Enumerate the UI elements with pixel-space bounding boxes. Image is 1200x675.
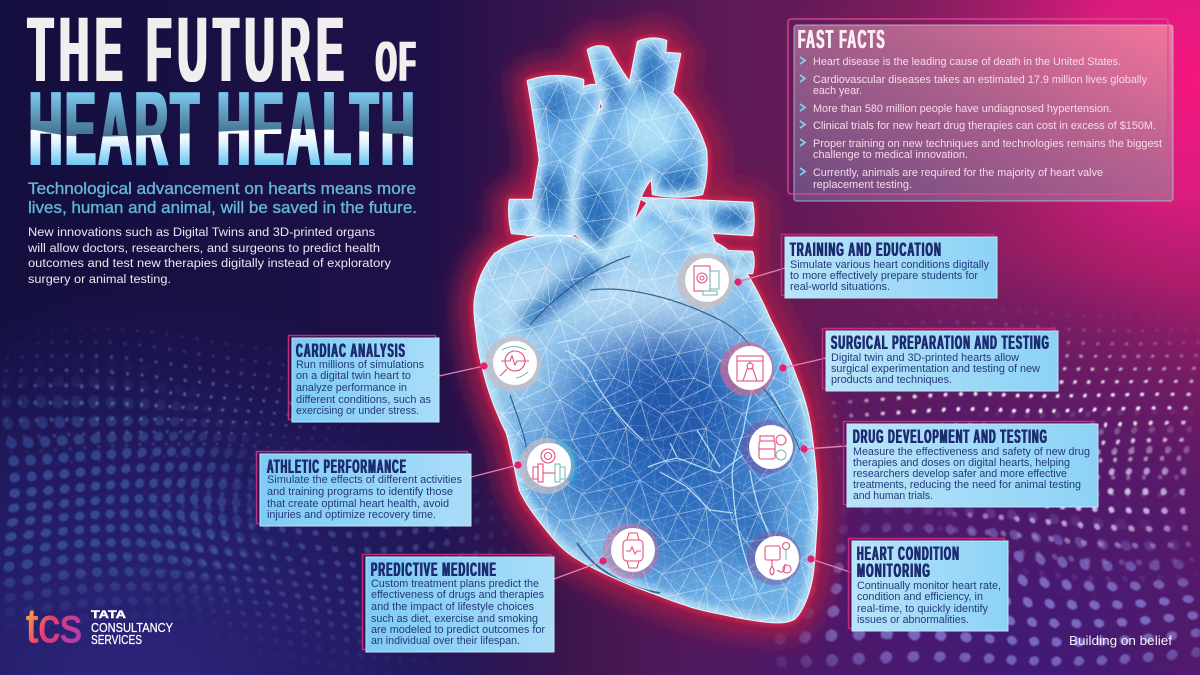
panel: athletic performance: Simulate the effects of different activities (267, 474, 462, 486)
panel: cardiac analysis: analyze performance in (296, 382, 407, 394)
panel: predictive medicine: PREDICTIVE MEDICINE (371, 560, 497, 581)
panel: predictive medicine (362, 554, 554, 652)
panel: predictive medicine: an individual over their lifespan. (371, 635, 520, 647)
logo: tata consultancy services (26, 600, 174, 653)
panel: cardiac analysis: different conditions, such as (296, 394, 431, 406)
icon: training and education (677, 253, 742, 309)
icon: heart condition monitoring (747, 531, 815, 585)
title: THE FUTURE (28, 0, 350, 101)
panel: training and education (782, 234, 997, 298)
panel: drug development and testing (844, 422, 1098, 507)
intro paragraph: surgery or animal testing. (28, 272, 171, 286)
panel: predictive medicine: and the impact of lifestyle choices (371, 601, 534, 613)
panel: drug development and testing: and human trials. (853, 490, 933, 502)
fast facts list: challenge to medical innovation. (813, 149, 968, 161)
fast facts list: More than 580 million people have undiagnosed hypertension. (813, 103, 1112, 115)
panel: heart condition monitoring: real-time, to quickly identify (857, 603, 988, 615)
panel: cardiac analysis: CARDIAC ANALYSIS (296, 341, 406, 362)
panel: training and education: to more effectively prepare students for (790, 270, 978, 282)
panel: athletic performance: ATHLETIC PERFORMANCE (267, 457, 407, 478)
panel: surgical preparation and testing (822, 328, 1058, 391)
icon: athletic performance (514, 438, 575, 494)
fast facts list: Clinical trials for new heart drug therapies can cost in excess of $150M. (813, 120, 1156, 132)
icon: drug development (741, 420, 808, 474)
panel: predictive medicine: effectiveness of drugs and therapies (371, 589, 544, 601)
fast facts list: each year. (813, 85, 862, 97)
title (26, 18, 416, 166)
intro paragraph: New innovations such as Digital Twins and 3D-printed organs (28, 225, 375, 239)
fast facts list: replacement testing. (813, 179, 912, 191)
panel: training and education: real-world situations. (790, 281, 890, 293)
panel: heart condition monitoring: issues or abnormalities. (857, 614, 969, 626)
panel: heart condition monitoring (848, 538, 1008, 631)
panel: athletic performance: injuries and optimize recovery time. (267, 509, 436, 521)
panel: fast facts: FAST FACTS (798, 24, 886, 54)
logo: tata consultancy services: tcs (26, 600, 82, 653)
intro paragraph: will allow doctors, researchers, and surgeons to predict health (27, 241, 380, 255)
panel: cardiac analysis: Run millions of simulations (296, 359, 424, 371)
icon: cardiac analysis (480, 336, 541, 392)
panel: predictive medicine: Custom treatment plans predict the (371, 578, 539, 590)
panel: training and education: TRAINING AND EDUCATION (790, 240, 942, 261)
panel: predictive medicine: such as diet, exercise and smoking (371, 613, 538, 625)
panel: drug development and testing: treatments, reducing the need for animal testing (853, 479, 1081, 491)
panel: heart condition monitoring: HEART CONDITION (857, 544, 960, 565)
subtitle: Technological advancement on hearts means more (28, 179, 416, 198)
heart illustration (450, 20, 830, 660)
panel: athletic performance: that create optimal heart health, avoid (267, 498, 449, 510)
panel: athletic performance: and training programs to identify those (267, 486, 453, 498)
panel: drug development and testing: researchers develop safer and more effective (853, 468, 1067, 480)
text: HEART HEALTH (29, 70, 417, 188)
tagline: Building on belief (1069, 633, 1172, 648)
fast facts list: Heart disease is the leading cause of death in the United States. (813, 56, 1121, 68)
panel: predictive medicine: are modeled to predict outcomes for (371, 624, 545, 636)
fast facts list: Proper training on new techniques and technologies remains the biggest (813, 138, 1163, 150)
icon: surgical preparation (720, 342, 787, 396)
panel: surgical preparation and testing: surgical experimentation and testing of new (831, 363, 1041, 375)
heart mesh (474, 38, 817, 622)
logo: tata consultancy services: CONSULTANCY (91, 621, 174, 635)
text: OF (376, 30, 418, 94)
panel: cardiac analysis: exercising or under stress. (296, 405, 419, 417)
intro paragraph: outcomes and test new therapies digitally instead of exploratory (28, 256, 392, 270)
panel: drug development and testing: Measure the effectiveness and safety of new drug (853, 446, 1090, 458)
panel: surgical preparation and testing: products and techniques. (831, 374, 952, 386)
panel: heart condition monitoring: MONITORING (857, 561, 931, 582)
panel: drug development and testing: therapies and doses on digital hearts, helping (853, 457, 1070, 469)
panel: fast facts (788, 19, 1173, 201)
logo: tata consultancy services: TATA (91, 609, 126, 621)
fast facts list: Cardiovascular diseases takes an estimated 17.9 million lives globally (813, 74, 1147, 86)
intro paragraph (27, 225, 392, 286)
panel: heart condition monitoring: Continually monitor heart rate, (857, 580, 1001, 592)
logo: tata consultancy services: SERVICES (91, 633, 142, 647)
subtitle (28, 179, 417, 217)
panel: heart condition monitoring: condition and efficiency, in (857, 591, 983, 603)
leader lines (439, 268, 850, 579)
fast facts list: Currently, animals are required for the majority of heart valve (813, 167, 1103, 179)
text: HEART HEALTH (29, 70, 417, 188)
heart veins (558, 337, 807, 590)
subtitle: lives, human and animal, will be saved in the future. (28, 198, 417, 217)
fast facts list (800, 56, 1163, 191)
panel: cardiac analysis (288, 336, 439, 422)
panel: athletic performance (256, 452, 471, 526)
panel: training and education: Simulate various heart conditions digitally (790, 259, 989, 271)
panel: surgical preparation and testing: Digital twin and 3D-printed hearts allow (831, 352, 1020, 364)
icon: predictive medicine (599, 523, 659, 579)
panel: cardiac analysis: on a digital twin heart to (296, 370, 411, 382)
